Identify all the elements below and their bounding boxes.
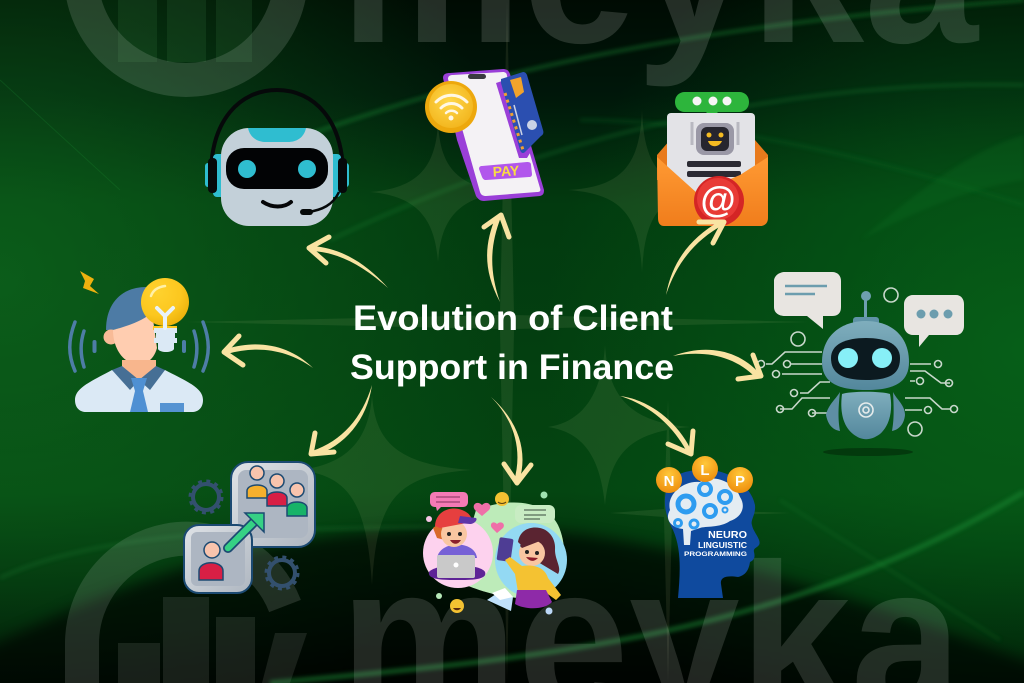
arrow: to team cards [311, 385, 372, 456]
arrow: to phone [484, 215, 509, 302]
arrow: to nlp head [620, 396, 693, 454]
hearts [474, 503, 490, 516]
arrow: to kids [491, 397, 531, 483]
letter badges [656, 467, 682, 493]
envelope [487, 588, 513, 611]
icon: robot with speech bubbles and circuit lines [758, 272, 964, 456]
green chat bubble [675, 92, 749, 118]
sparkle decorations [185, 0, 810, 683]
gears [674, 483, 731, 528]
watermark bars top [118, 0, 252, 62]
icon: neuro linguistic programming head: N [664, 473, 674, 490]
title [350, 299, 674, 387]
sound waves [70, 322, 208, 371]
icon: phone with wifi coin and card [425, 69, 544, 201]
boy [429, 565, 485, 580]
brain [668, 478, 743, 545]
robot face [692, 122, 738, 145]
arrow: to person with lightbulb [224, 336, 313, 368]
lightning bolt [80, 271, 99, 294]
nlp caption: LINGUISTIC [698, 541, 747, 550]
speech bubble left [774, 272, 841, 329]
green chat bubble [515, 505, 555, 523]
title: Support in Finance [350, 348, 674, 387]
icon: neuro linguistic programming head: L [700, 462, 710, 479]
icon: kids chatting by laptop and phone [423, 492, 567, 614]
pink chat bubble [430, 492, 468, 511]
nlp caption: PROGRAMMING [684, 551, 747, 558]
watermark ring bottom [82, 539, 285, 683]
arrow: to chat robot [673, 350, 761, 379]
emojis [495, 492, 509, 506]
icon: headset support robot [205, 90, 349, 226]
pay label: PAY [492, 162, 520, 180]
watermark ring top [81, 0, 291, 80]
icon: person with lightbulb idea [70, 271, 208, 412]
green arrow [228, 513, 264, 548]
arrow: to envelope [666, 221, 724, 295]
watermark: top logo and wordmark [81, 0, 980, 88]
gears [190, 481, 298, 589]
watermark: bottom logo and wordmark [82, 520, 964, 683]
girl [518, 528, 559, 574]
circuits [758, 288, 958, 436]
nlp caption [684, 530, 747, 558]
arrow: to headset robot [309, 237, 388, 288]
title: Evolution of Client [353, 299, 673, 338]
icon: envelope with robot and at sign [657, 92, 768, 226]
speech bubble right [904, 295, 964, 347]
watermark bars bottom [118, 597, 307, 683]
icon: neuro linguistic programming head [656, 456, 760, 598]
at sign: @ [700, 179, 736, 220]
icon: neuro linguistic programming head: P [735, 473, 745, 490]
nlp caption: NEURO [708, 530, 747, 541]
icon: team growth cards with arrow [184, 462, 315, 593]
